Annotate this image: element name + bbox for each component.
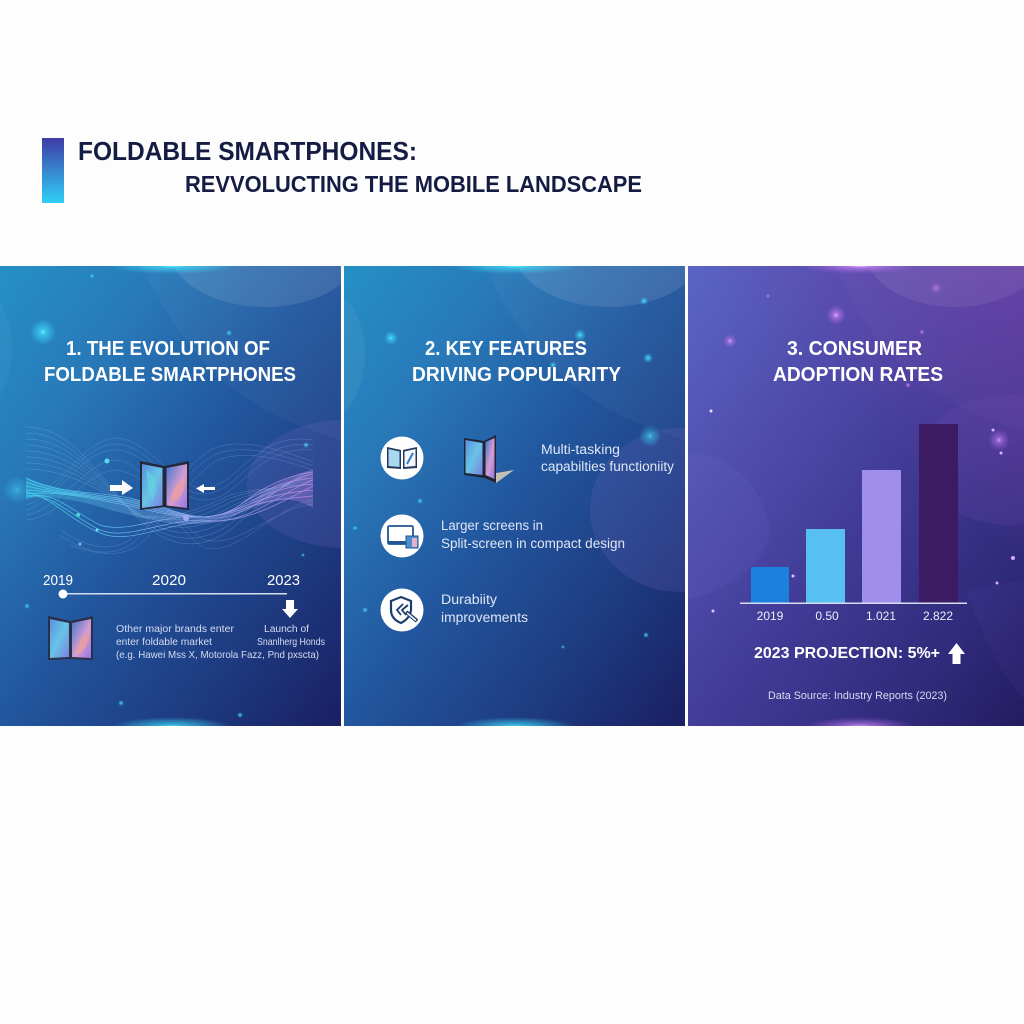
projection callout: 2023 PROJECTION: 5%+ xyxy=(754,645,940,662)
text: multi-tasking: capabilties functioniity xyxy=(541,459,674,474)
section heading: ADOPTION RATES xyxy=(773,364,943,386)
text: other brands: (e.g. Hawei Mss X, Motorola Fazz, Pnd pxscta) xyxy=(116,649,319,661)
bar chart: 0.50 xyxy=(815,609,839,623)
arrow: right-pointing xyxy=(110,480,133,495)
section heading: DRIVING POPULARITY xyxy=(412,364,622,386)
section heading xyxy=(413,341,621,381)
bar chart: 1.021 xyxy=(866,609,896,623)
wave graphic xyxy=(26,427,313,554)
accent bar xyxy=(42,138,64,203)
text: durability: improvements xyxy=(441,610,528,625)
text: launch xyxy=(257,624,325,648)
text: larger screens xyxy=(441,518,625,551)
section heading: 1. THE EVOLUTION OF xyxy=(66,338,270,360)
timeline: 2020 xyxy=(152,572,186,589)
section heading xyxy=(774,341,942,381)
bar chart xyxy=(740,424,967,623)
icon: up arrow xyxy=(948,643,965,664)
icon: monitor and tablet xyxy=(380,514,424,558)
icon: shield xyxy=(380,588,424,632)
bar chart: 2.822 xyxy=(923,609,953,623)
text: other brands: enter foldable market xyxy=(116,636,212,648)
data source: Data Source: Industry Reports (2023) xyxy=(768,690,947,702)
text: durability xyxy=(441,592,528,625)
arrow: left-pointing xyxy=(196,484,215,493)
icon: foldable phone with keyboard xyxy=(464,435,514,483)
text: launch: Snanlherg Honds xyxy=(257,637,325,648)
panel: consumer adoption rates xyxy=(688,266,1024,726)
subtitle: REVVOLUCTING THE MOBILE LANDSCAPE xyxy=(185,171,642,197)
bar chart: 2019 xyxy=(757,609,784,623)
header xyxy=(42,136,642,203)
icon: foldable phone small xyxy=(48,616,93,660)
text: multi-tasking: Multi-tasking xyxy=(541,442,620,457)
text: larger screens: Larger screens in xyxy=(441,518,543,533)
text: other brands xyxy=(116,623,319,661)
icon: foldable phone xyxy=(140,461,189,510)
panel: key features xyxy=(344,266,685,726)
text: other brands: Other major brands enter xyxy=(116,623,234,635)
icon: dual screens xyxy=(380,436,424,480)
section heading: 3. CONSUMER xyxy=(787,338,923,360)
section heading xyxy=(45,341,296,381)
title: FOLDABLE SMARTPHONES: xyxy=(78,136,417,166)
timeline: 2023 xyxy=(267,572,300,589)
text: larger screens: Split-screen in compact design xyxy=(441,536,625,551)
text: launch: Launch of xyxy=(264,624,309,635)
text: durability: Durabiity xyxy=(441,592,497,607)
timeline xyxy=(43,572,300,618)
section heading: 2. KEY FEATURES xyxy=(425,338,587,360)
panel: evolution of foldable smartphones xyxy=(0,266,341,726)
section heading: FOLDABLE SMARTPHONES xyxy=(44,364,296,386)
text: multi-tasking xyxy=(541,442,674,474)
timeline: 2019 xyxy=(43,573,73,589)
